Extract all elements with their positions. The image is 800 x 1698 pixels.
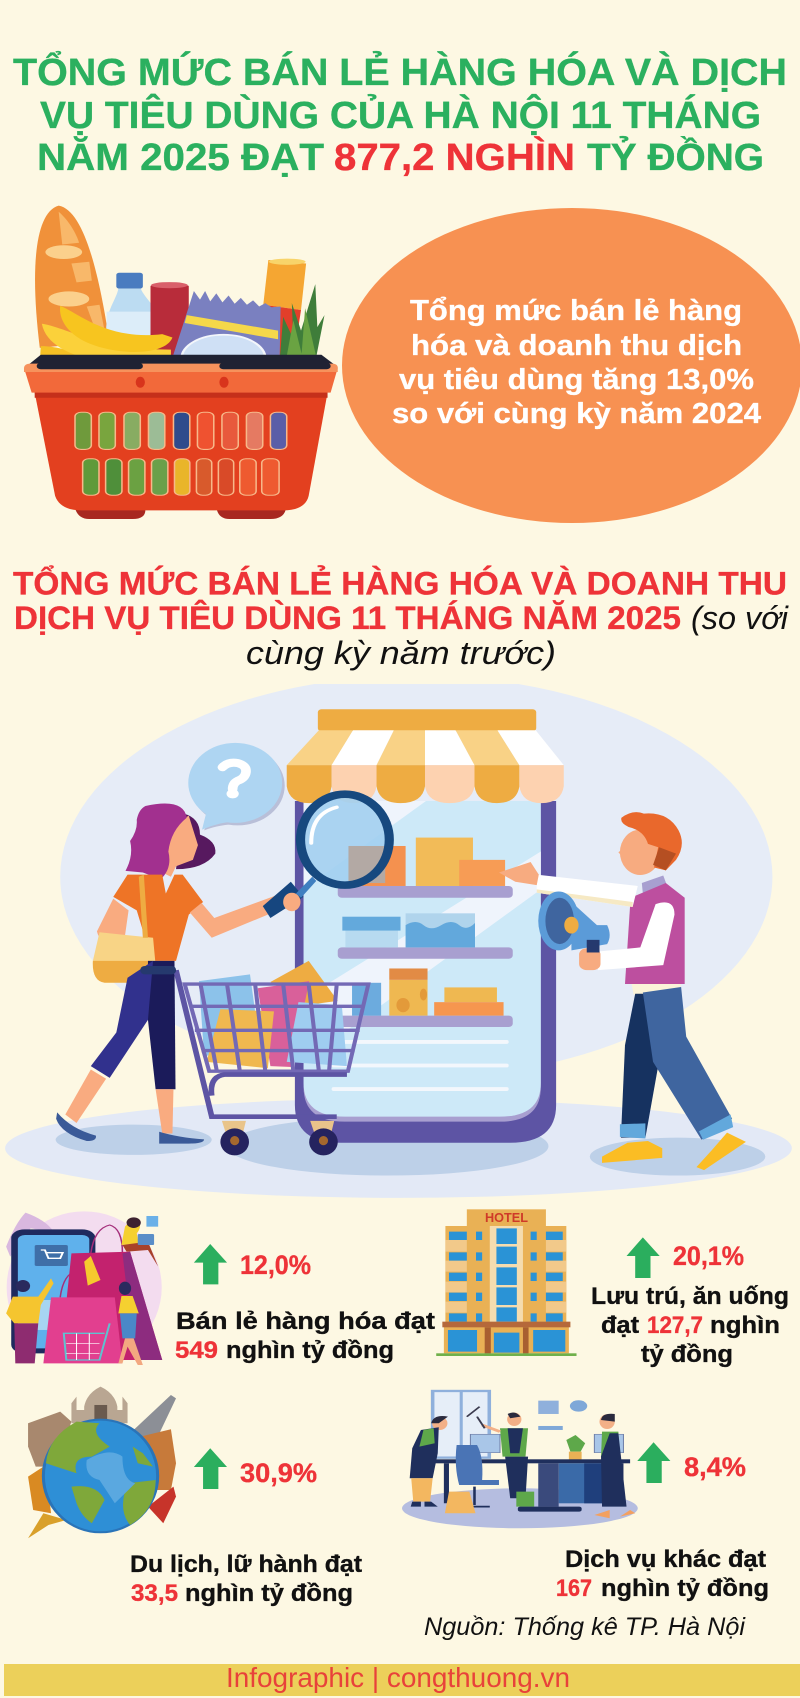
callout: growth ellipse: vụ tiêu dùng tăng 13,0% [399, 364, 754, 396]
stat: accommodation: nghìn [710, 1312, 780, 1339]
stat: other services [556, 1442, 769, 1602]
title: VỤ TIÊU DÙNG CỦA HÀ NỘI 11 THÁNG [40, 92, 761, 137]
title [13, 49, 787, 179]
stat: retail [175, 1244, 435, 1364]
stat: retail: 549 [175, 1337, 218, 1364]
callout: growth ellipse: Tổng mức bán lẻ hàng [410, 295, 742, 327]
stat: other services: Dịch vụ khác đạt [565, 1546, 766, 1573]
section heading: cùng kỳ năm trước) [246, 635, 556, 671]
woman [56, 804, 316, 1144]
icon: hotel [436, 1209, 577, 1356]
section heading: (so với [691, 600, 789, 636]
stat: other services: nghìn tỷ đồng [601, 1575, 769, 1602]
stat: accommodation: Lưu trú, ăn uống [591, 1283, 789, 1310]
title: TỔNG MỨC BÁN LẺ HÀNG HÓA VÀ DỊCH [13, 49, 787, 94]
stat: retail: nghìn tỷ đồng [226, 1337, 394, 1364]
stat: accommodation: 20,1% [673, 1241, 744, 1271]
stat: accommodation: 127,7 [647, 1312, 703, 1339]
icon: shopping [6, 1211, 162, 1365]
footer bar [4, 1662, 800, 1696]
stat: tourism: nghìn tỷ đồng [185, 1580, 353, 1607]
callout: growth ellipse: hóa và doanh thu dịch [411, 330, 742, 362]
icon: globe with landmarks [28, 1387, 176, 1538]
illustration: online shop scene [5, 676, 792, 1198]
source note: Nguồn: Thống kê TP. Hà Nội [424, 1613, 746, 1641]
stat: accommodation [591, 1237, 789, 1368]
stat: tourism: 30,9% [240, 1458, 317, 1488]
magnifying glass [301, 794, 389, 885]
stat: tourism: 33,5 [131, 1580, 178, 1607]
phone shop body [295, 801, 556, 1143]
shopping cart [140, 961, 368, 1155]
section heading: DỊCH VỤ TIÊU DÙNG 11 THÁNG NĂM 2025 [14, 600, 681, 636]
title: NĂM 2025 ĐẠT [37, 135, 324, 179]
stat: retail: 12,0% [240, 1250, 311, 1280]
section heading [13, 566, 789, 671]
stat: other services: 167 [556, 1575, 592, 1602]
stat: accommodation: đạt [601, 1312, 639, 1339]
icon: grocery basket [24, 206, 338, 519]
section heading: TỔNG MỨC BÁN LẺ HÀNG HÓA VÀ DOANH THU [13, 566, 787, 602]
title: TỶ ĐỒNG [587, 135, 764, 179]
stat: other services: 8,4% [684, 1452, 746, 1482]
stat: tourism [130, 1448, 362, 1607]
icon: cleaning service team [402, 1391, 638, 1528]
callout: growth ellipse: so với cùng kỳ năm 2024 [392, 398, 761, 430]
stat: tourism: Du lịch, lữ hành đạt [130, 1551, 362, 1578]
man [499, 812, 746, 1170]
callout: growth ellipse [342, 208, 800, 523]
title: 877,2 NGHÌN [334, 135, 575, 179]
stat: accommodation: tỷ đồng [641, 1341, 733, 1368]
icon: hotel: HOTEL [485, 1210, 528, 1225]
stat: retail: Bán lẻ hàng hóa đạt [176, 1308, 435, 1335]
speech bubble [188, 743, 285, 830]
footer bar: Infographic | congthuong.vn [226, 1662, 570, 1693]
awning [287, 709, 564, 803]
